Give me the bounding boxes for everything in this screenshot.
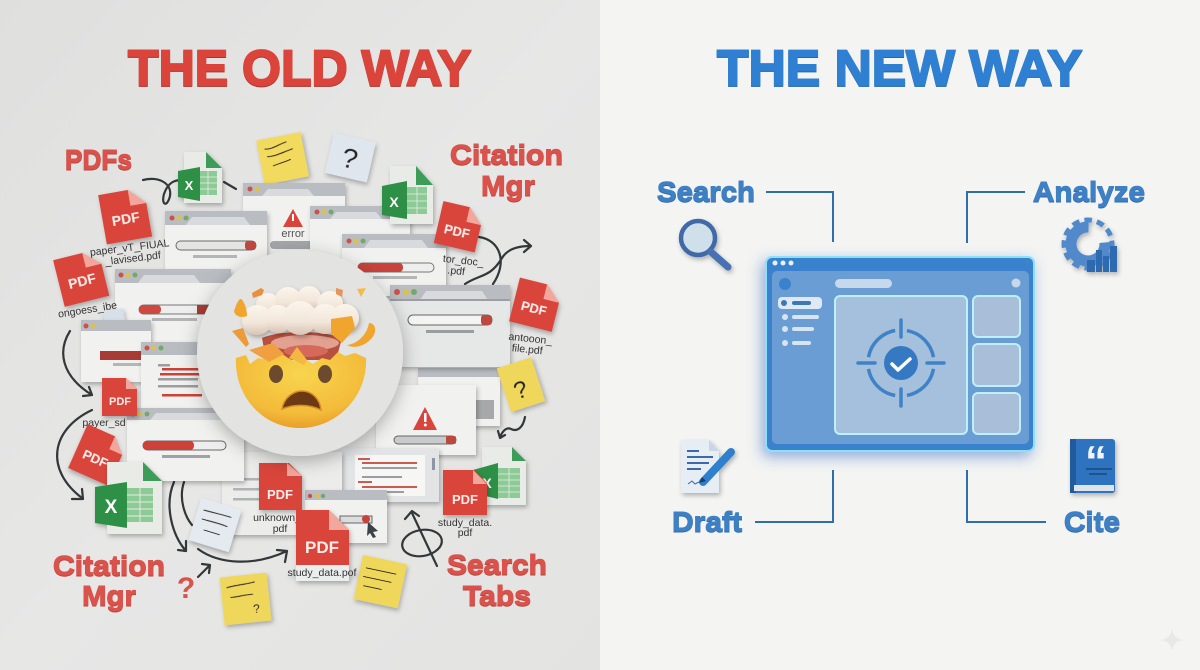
label: citation manager top right: Citation: [450, 139, 563, 170]
icon: quote book: “: [1085, 437, 1107, 486]
connector: search: [766, 192, 833, 242]
icon: pdf antooon: file.pdf: [511, 342, 543, 357]
label: citation manager bottom left: Mgr: [82, 580, 136, 611]
label: citation manager top right: [450, 139, 563, 201]
panel: new way background: [600, 0, 1200, 670]
icon: pdf unknown: unknown_: [253, 512, 301, 524]
panel: old way clutter collage: [53, 132, 563, 625]
browser window: far left: [81, 320, 151, 382]
icon: excel top left: [178, 152, 222, 203]
icon: document with pen: [681, 440, 731, 493]
icon: quote book: [1070, 437, 1115, 493]
watermark: sparkle: [1160, 628, 1184, 652]
question mark: red: ?: [177, 572, 195, 605]
icon: pdf payer: payer_sd: [82, 417, 126, 429]
label: search tabs: Search: [447, 549, 547, 580]
browser window: lower left progress: [127, 408, 244, 481]
icon: pdf paper_vT_FINAL: paper_vT_FIUAL: [89, 237, 170, 259]
label: search tabs: [447, 549, 547, 611]
icon: pdf antooon: PDF: [519, 298, 548, 319]
icon: pdf study_data large: [288, 510, 357, 581]
label: PDFs: PDFs: [65, 144, 132, 175]
connector: analyze: [967, 192, 1025, 243]
label: citation manager bottom left: [53, 550, 165, 611]
icon: pdf unknown: PDF: [267, 487, 293, 502]
app main panel with target check: [835, 296, 967, 434]
icon: pdf study_data large: PDF: [305, 538, 339, 557]
icon: pdf behind excel: [68, 424, 128, 486]
browser window: error lower right: [376, 385, 476, 455]
icon: excel bottom left: X: [105, 497, 118, 518]
sticky note: question mark blue: [325, 133, 376, 182]
icon: pdf tor_doc: tor_doc_: [442, 253, 484, 269]
panel: new way workflow: [657, 176, 1145, 537]
label: citation manager bottom left: Citation: [53, 550, 165, 581]
paper: code page behind: [222, 452, 342, 535]
label: citation manager top right: Mgr: [481, 170, 535, 201]
browser window: right back stack: [418, 368, 500, 426]
sticky note: yellow bottom: [220, 573, 271, 625]
icon: pdf antooon: [507, 278, 563, 358]
browser window: lower search with cursor: [305, 490, 387, 543]
icon: pdf study_data right: pdf: [458, 527, 472, 539]
panel: old way background: [0, 0, 600, 670]
title: the new way: THE NEW WAY: [717, 40, 1082, 96]
browser window: grey search: [390, 285, 510, 367]
icon: excel top left: X: [185, 178, 194, 193]
browser window: code lower: [342, 448, 439, 502]
sticky note: yellow bottom: ?: [252, 602, 261, 616]
arrows: scribbled paths: [57, 179, 531, 577]
sticky note: yellow right: [354, 555, 407, 608]
sticky note: question mark right: ?: [510, 376, 531, 405]
icon: pdf paper_vT_FINAL: _lavised.pdf: [103, 249, 162, 268]
icon: pdf payer: PDF: [109, 396, 131, 408]
icon: pdf unknown: [253, 463, 302, 535]
icon: excel top right: X: [389, 194, 399, 210]
label: draft: Draft: [672, 506, 742, 537]
connector: draft: [755, 470, 833, 522]
icon: pdf ongoess: ongoess_ibe: [57, 299, 118, 321]
icon: pdf ongoess: [53, 249, 118, 321]
icon: excel top right: [382, 166, 433, 224]
icon: pdf study_data right: [438, 470, 492, 539]
browser window: top center: [310, 206, 410, 276]
icon: pdf unknown: pdf: [273, 523, 287, 535]
browser window: search top left: [165, 211, 267, 277]
icon: magnifying glass: [681, 221, 728, 267]
label: cite: Cite: [1064, 506, 1120, 537]
icon: excel bottom right: [473, 447, 526, 505]
app window mockup: [765, 256, 1035, 452]
icon: pdf study_data right: PDF: [452, 492, 478, 507]
title: the old way: THE OLD WAY: [128, 40, 471, 96]
icon: pdf antooon: antooon_: [508, 331, 553, 347]
label: search tabs: Tabs: [463, 580, 531, 611]
panel: central circle with mind blown emoji: [197, 250, 403, 456]
app side cards: [973, 296, 1020, 434]
icon: pdf paper_vT_FINAL: PDF: [111, 208, 141, 229]
icon: excel bottom left: [95, 462, 162, 534]
connector: cite: [967, 470, 1046, 522]
sticky note: handwriting blue: [188, 498, 242, 552]
icon: excel bottom right: X: [482, 475, 492, 491]
browser window: left progress: [115, 269, 231, 350]
label: analyze: Analyze: [1033, 176, 1145, 207]
browser window: progress top right: [342, 234, 446, 296]
icon: pdf ongoess: PDF: [66, 270, 98, 292]
icon: exploding head emoji: [232, 286, 375, 428]
app sidebar and content panel: [772, 271, 1029, 444]
icon: pdf behind excel: PDF: [80, 447, 110, 471]
paper: blue sheet: [103, 308, 129, 349]
icon: target with check mark: [858, 320, 944, 406]
browser window: code: [141, 342, 213, 410]
browser window: error back: [243, 183, 345, 263]
icon: pdf study_data large: study_data.pof: [288, 567, 357, 579]
sticky note: question mark right: [497, 357, 545, 412]
sticky note: question mark blue: ?: [339, 142, 361, 175]
browser window: error back: error: [281, 228, 305, 240]
icon: pdf tor_doc: [434, 201, 484, 280]
sticky note: handwriting top: [256, 132, 309, 185]
label: search: Search: [657, 176, 755, 207]
icon: pdf study_data right: study_data.: [438, 517, 492, 529]
icon: pdf tor_doc: PDF: [443, 221, 471, 242]
icon: pdf payer: [82, 378, 137, 429]
icon: gear with chart: [1062, 218, 1117, 272]
icon: pdf paper_vT_FINAL: [89, 187, 172, 270]
icon: pdf tor_doc: .pdf: [447, 264, 466, 278]
